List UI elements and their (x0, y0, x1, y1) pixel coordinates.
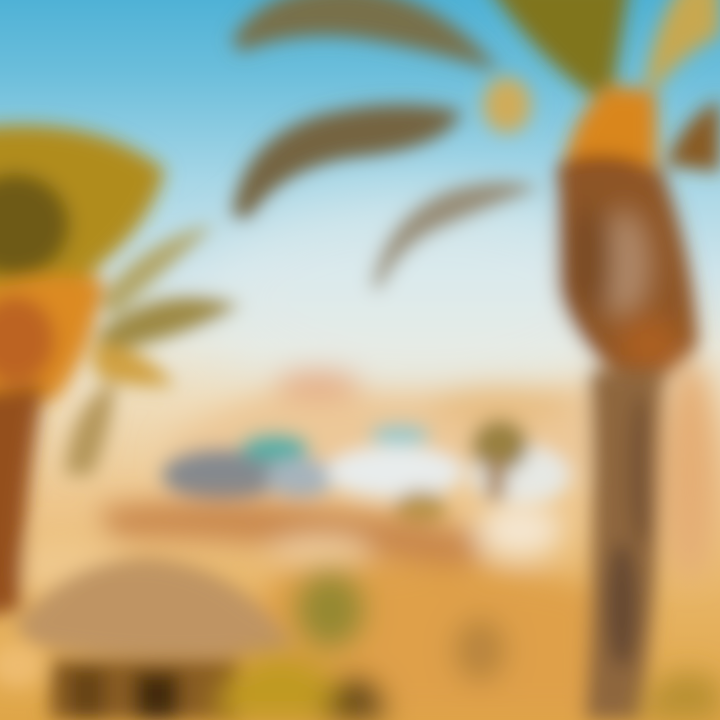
right palm fronds (232, 0, 720, 288)
right palm trunk (558, 162, 718, 720)
hut base (0, 643, 240, 720)
left palm trunk (0, 275, 105, 620)
distant dunes (170, 371, 600, 490)
thatched hut roof (15, 558, 295, 659)
sky haze (200, 190, 640, 410)
oasis buildings and water (162, 420, 570, 526)
left palm fronds (65, 225, 240, 475)
right palm crown (483, 77, 658, 184)
left palm crown (0, 125, 165, 320)
sand foreground (0, 502, 600, 720)
foreground shrubs (215, 572, 720, 720)
